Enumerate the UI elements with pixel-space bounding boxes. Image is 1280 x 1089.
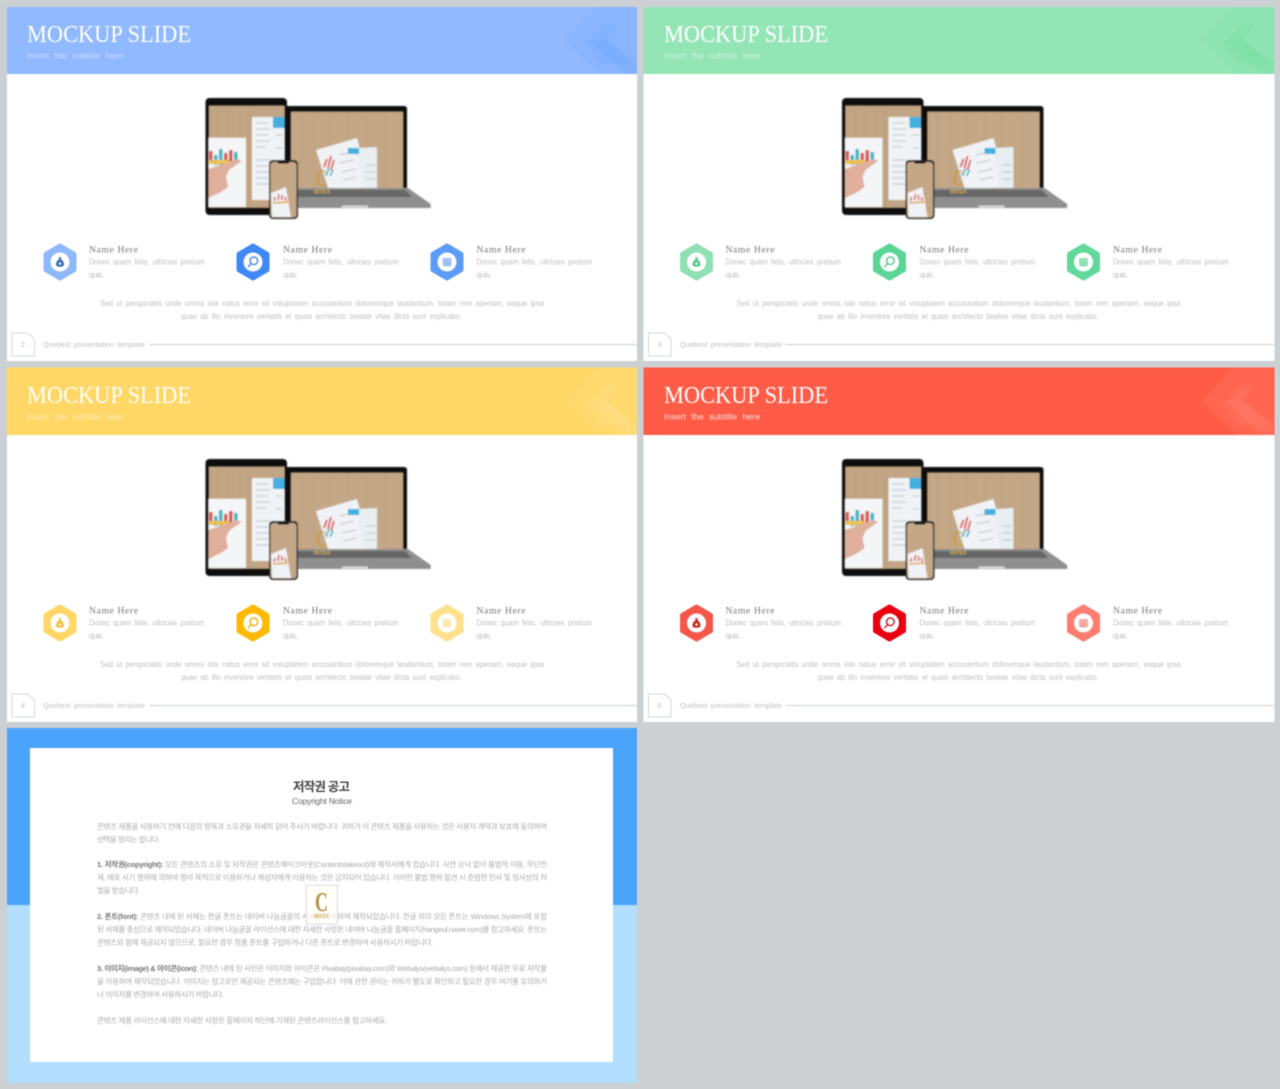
feature 2 text: quis. — [283, 632, 298, 640]
feature 1 text — [89, 606, 205, 640]
notice body text: 된 서체를 중심으로 제작되었습니다. 네이버 나눔글꼴 라이선스에 대한 자세한 사항은 네이버 나눔글꼴 홈페이지(hangeul.naver.com)를 참고하세요. 폰트는 — [97, 924, 547, 934]
feature 3 text: Donec quam felis, ultricies pretium — [1113, 618, 1229, 628]
feature 3 text: Donec quam felis, ultricies pretium — [476, 258, 592, 266]
icon: box — [432, 246, 462, 278]
feature 1 text: quis. — [89, 632, 104, 640]
page number: 3 — [657, 340, 662, 349]
feature 3 text: quis. — [476, 632, 492, 640]
feature 1 text — [726, 246, 841, 280]
feature 2 text: Name Here — [920, 606, 968, 616]
header band — [7, 368, 637, 435]
notice body text: 벌을 받습니다. — [97, 885, 140, 895]
header chevron decoration — [565, 7, 640, 74]
paragraph: Sed ut perspiciatis unde omnis iste natus error sit voluptatem accusantium doloremque laudantium, totam rem aperiam, eaque ipsa — [736, 299, 1181, 308]
paragraph: Sed ut perspiciatis unde omnis iste natus error sit voluptatem accusantium doloremque laudantium, totam rem aperiam, eaque ipsa — [100, 299, 544, 308]
watermark logo: C — [315, 887, 328, 917]
feature 2 text — [920, 246, 1035, 280]
notice body text: 3. 이미지(image) & 아이콘(icon): 콘텐츠 내에 된 사진은 이미지와 아이콘은 Pixabay(pixabay.com)와 Webalys(webalys.com) 등에서 제공한 무료 저작물 — [97, 963, 547, 973]
watermark logo — [306, 885, 338, 924]
notice body text: 나 이미지를 변경하여 사용하시기 바랍니다. — [97, 989, 224, 999]
notice body text: 콘텐츠 제품을 사용하기 전에 다음의 항목과 소유권을 자세히 읽어 주시기 바랍니다. 귀하가 이 콘텐츠 제품을 사용하는 것은 사용자 계약과 보호에 동의하여 — [97, 821, 547, 831]
feature 2 text: Name Here — [283, 606, 332, 616]
feature 2 text — [283, 246, 399, 280]
feature 1 text: Name Here — [726, 606, 774, 616]
subtitle: Insert the subtitle here — [27, 50, 123, 60]
page number: 5 — [657, 701, 662, 710]
title: MOCKUP SLIDE — [27, 22, 191, 48]
subtitle: Insert the subtitle here — [664, 412, 760, 422]
feature 2 text: quis. — [283, 270, 298, 280]
header band — [644, 368, 1274, 435]
subtitle: Insert the subtitle here — [27, 412, 123, 422]
title: MOCKUP SLIDE — [664, 22, 828, 48]
feature 3 text: quis. — [476, 270, 492, 280]
feature 1 text: quis. — [89, 270, 104, 280]
notice body text: 2. 폰트(font): 콘텐츠 내에 된 서체는 한글 폰트는 네이버 나눔글꼴의 서체를 이용하여 제작되었습니다. 한글 외의 모든 폰트는 Windows System에 포함 — [97, 911, 547, 921]
feature 3 text: quis. — [1113, 270, 1128, 280]
paragraph: quae ab illo inventore veritatis et quasi architecto beatae vitae dicta sunt explicabo. — [818, 312, 1098, 321]
feature 2 text: Name Here — [283, 246, 332, 256]
feature 2 text: quis. — [920, 632, 934, 640]
icon: magnifier — [875, 606, 904, 640]
feature 3 text: Name Here — [1113, 246, 1162, 256]
panel: green mockup slide — [644, 7, 1276, 361]
feature 3 text: Donec quam felis, ultricies pretium — [476, 618, 592, 628]
icon: box — [1069, 606, 1098, 640]
feature 2 text — [920, 606, 1035, 640]
watermark logo: INTEX — [314, 914, 330, 920]
panel: red mockup slide — [644, 368, 1276, 722]
paragraph — [736, 660, 1181, 682]
title: MOCKUP SLIDE — [664, 383, 828, 409]
feature 2 text — [283, 606, 399, 640]
notice body text: 재, 배포 사기 행위에 의하여 영리 목적으로 이용하거나 제삼자에게 이용하는 것은 금지되어 있습니다. 이러한 불법 행위 발견 시 준엄한 민사 및 형사상의 처 — [97, 872, 547, 882]
feature 2 text: Donec quam felis, ultricies pretium — [920, 258, 1035, 266]
page number — [12, 694, 34, 717]
paragraph — [736, 299, 1181, 321]
feature 1 text: Donec quam felis, ultricies pretium — [89, 258, 205, 266]
header chevron decoration — [565, 368, 640, 435]
feature 1 text: Donec quam felis, ultricies pretium — [726, 618, 841, 628]
device mockup image — [842, 459, 1067, 580]
paragraph: quae ab illo inventore veritatis et quasi architecto beatae vitae dicta sunt explicabo. — [181, 312, 462, 321]
device mockup image — [842, 98, 1067, 219]
notice body text: 선택을 알리는 합니다. — [97, 834, 160, 844]
panel: copyright notice — [7, 728, 637, 1083]
paragraph: quae ab illo inventore veritatis et quasi architecto beatae vitae dicta sunt explicabo. — [818, 673, 1098, 682]
panel: blue mockup slide — [7, 7, 640, 361]
feature 3 text: Name Here — [476, 246, 526, 256]
feature 3 text: quis. — [1113, 632, 1128, 640]
device mockup image — [206, 98, 431, 219]
page number — [648, 694, 671, 717]
feature 2 text: Donec quam felis, ultricies pretium — [283, 258, 399, 266]
feature 3 text: Name Here — [476, 606, 526, 616]
feature 1 text: Name Here — [89, 606, 138, 616]
feature 1 text: quis. — [726, 632, 740, 640]
page number: 2 — [21, 340, 25, 349]
icon: magnifier — [875, 246, 904, 278]
feature 1 text — [89, 246, 205, 280]
icon: money bag — [46, 246, 74, 278]
header band — [7, 7, 637, 74]
icon: magnifier — [238, 606, 268, 640]
subheading: Copyright Notice — [292, 796, 352, 806]
notice body text — [97, 821, 547, 1025]
paragraph — [100, 299, 544, 321]
page number: 4 — [21, 701, 25, 710]
notice body text: 콘텐츠와 함께 제공되지 않으므로, 필요한 경우 정품 폰트를 구입하거나 다른 폰트로 변경하여 사용하시기 바랍니다. — [97, 937, 433, 947]
header chevron decoration — [1202, 368, 1276, 435]
notice body text: 을 이용하여 제작되었습니다. 이미지는 참고로만 제공되는 콘텐츠에는 구입합니다. 이에 관한 권리는 귀하가 별도로 확인하고 필요한 경우 여기를 유의하거 — [97, 976, 547, 986]
notice body text: 콘텐츠 제품 라이선스에 대한 자세한 사항은 홈페이지 하단에 기재된 콘텐츠라이선스를 참고하세요. — [97, 1015, 387, 1025]
feature 1 text: Name Here — [726, 246, 774, 256]
icon: money bag — [46, 606, 74, 640]
footer text: Quebest presentation template — [680, 701, 782, 710]
feature 1 text: Donec quam felis, ultricies pretium — [726, 258, 841, 266]
feature 1 text: quis. — [726, 270, 740, 280]
feature 1 text: Name Here — [89, 246, 138, 256]
footer text: Quebest presentation template — [43, 701, 145, 710]
paragraph: quae ab illo inventore veritatis et quasi architecto beatae vitae dicta sunt explicabo. — [181, 673, 462, 682]
paragraph: Sed ut perspiciatis unde omnis iste natus error sit voluptatem accusantium doloremque laudantium, totam rem aperiam, eaque ipsa — [736, 660, 1181, 669]
feature 3 text — [1113, 606, 1229, 640]
feature 1 text: Donec quam felis, ultricies pretium — [89, 618, 205, 628]
icon: magnifier — [238, 246, 268, 278]
title: MOCKUP SLIDE — [27, 383, 191, 409]
feature 2 text: quis. — [920, 270, 934, 280]
feature 3 text — [476, 606, 592, 640]
feature 2 text: Donec quam felis, ultricies pretium — [920, 618, 1035, 628]
feature 3 text — [1113, 246, 1229, 280]
feature 2 text: Donec quam felis, ultricies pretium — [283, 618, 399, 628]
notice body text: 1. 저작권(copyright): 모든 콘텐츠의 소유 및 저작권은 콘텐츠메이크아웃(Contentstakeout)에 제작사에게 있습니다. 사전 승낙 없이 불법적 이용, 무단전 — [97, 859, 547, 869]
footer text: Quebest presentation template — [680, 340, 782, 349]
header band — [644, 7, 1274, 74]
page number — [12, 333, 34, 356]
heading: 저작권 공고 — [293, 779, 350, 794]
panel: yellow mockup slide — [7, 368, 640, 722]
icon: box — [432, 606, 462, 640]
paragraph: Sed ut perspiciatis unde omnis iste natus error sit voluptatem accusantium doloremque laudantium, totam rem aperiam, eaque ipsa — [100, 660, 544, 669]
feature 3 text: Donec quam felis, ultricies pretium — [1113, 258, 1229, 266]
paragraph — [100, 660, 544, 682]
device mockup image — [206, 459, 431, 580]
icon: money bag — [682, 246, 711, 278]
feature 1 text — [726, 606, 841, 640]
feature 2 text: Name Here — [920, 246, 968, 256]
header chevron decoration — [1202, 7, 1276, 74]
icon: box — [1069, 246, 1098, 278]
feature 3 text: Name Here — [1113, 606, 1162, 616]
subtitle: Insert the subtitle here — [664, 50, 760, 60]
feature 3 text — [476, 246, 592, 280]
icon: money bag — [682, 606, 711, 640]
page number — [648, 333, 671, 356]
footer text: Quebest presentation template — [43, 340, 145, 349]
